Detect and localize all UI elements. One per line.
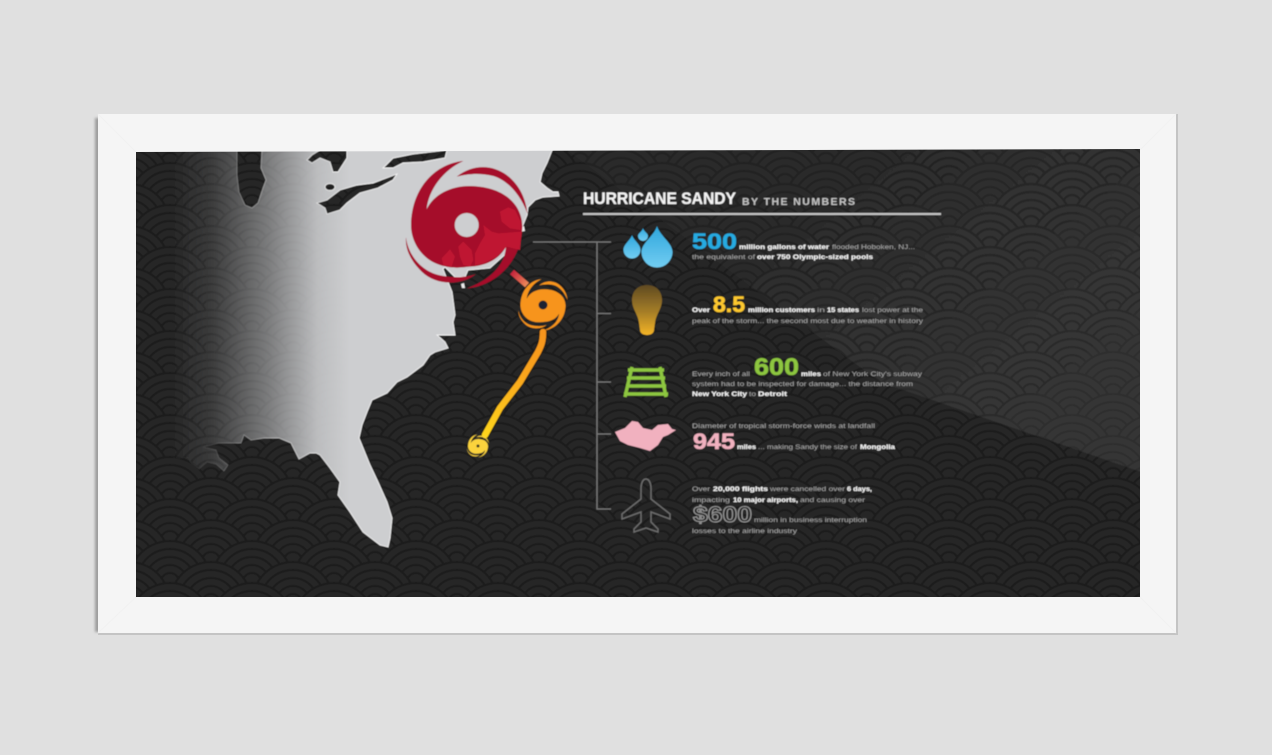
description: 20,000 flights xyxy=(713,486,768,493)
stat: flights xyxy=(622,479,872,535)
description: 15 states xyxy=(827,307,859,314)
description: New York City xyxy=(692,391,747,398)
lighter land patches through storm xyxy=(442,207,522,267)
description: Diameter of tropical storm-force winds at landfall xyxy=(692,423,876,430)
description: miles xyxy=(737,444,756,451)
description: Every inch of all xyxy=(692,371,751,378)
panel: dark infographic xyxy=(130,145,1144,601)
description: impacting xyxy=(692,497,730,504)
track line between storms xyxy=(485,272,543,435)
description: over 750 Olympic-sized pools xyxy=(757,254,873,261)
number 600: 600 xyxy=(754,354,799,381)
description xyxy=(692,486,872,535)
description: peak of the storm... the second most due to weather in history xyxy=(692,318,924,325)
description xyxy=(692,244,915,261)
description: losses to the airline industry xyxy=(692,528,798,535)
description: million gallons of water xyxy=(739,244,830,251)
title: HURRICANE SANDY xyxy=(583,190,736,208)
description: to xyxy=(749,391,756,398)
description xyxy=(692,307,924,325)
number 8.5: 8.5 xyxy=(713,292,745,317)
description: were cancelled over xyxy=(769,486,846,493)
description: and causing over xyxy=(800,497,866,504)
description: 6 days, xyxy=(847,486,872,493)
leader lines timeline xyxy=(533,242,611,509)
stat: power xyxy=(632,285,924,335)
description: ... making Sandy the size of xyxy=(758,444,857,451)
description: the equivalent of xyxy=(692,254,755,261)
description: Mongolia xyxy=(860,444,895,451)
picture frame xyxy=(95,114,1178,635)
icon: light bulb xyxy=(632,285,662,335)
number $600: $600 xyxy=(693,502,752,527)
white coast islands xyxy=(461,226,525,288)
description: 10 major airports, xyxy=(733,497,798,504)
diagonal light sheen xyxy=(698,149,1140,471)
description: flooded Hoboken, NJ... xyxy=(832,244,915,251)
stat: water xyxy=(624,226,915,268)
number 500: 500 xyxy=(692,229,737,254)
icon: railway tracks xyxy=(624,367,668,397)
icon: yellow tropical storm xyxy=(467,434,489,457)
description: miles xyxy=(801,371,821,378)
description: Over xyxy=(692,307,711,314)
description: Detroit xyxy=(758,391,788,398)
description: million in business interruption xyxy=(754,517,867,524)
stat: storm size xyxy=(615,421,895,454)
description: million customers xyxy=(748,307,815,314)
description: lost power at the xyxy=(862,307,923,314)
description xyxy=(692,371,923,398)
title: BY THE NUMBERS xyxy=(742,196,855,208)
icon: Mongolia silhouette xyxy=(615,421,676,451)
description: in xyxy=(817,307,826,314)
description xyxy=(692,423,895,451)
icon: orange hurricane xyxy=(518,279,568,331)
description: Over xyxy=(692,486,711,493)
icon: water drops xyxy=(624,226,672,268)
icon: airplane outline xyxy=(622,479,670,532)
number 945: 945 xyxy=(693,429,735,454)
stat: subway xyxy=(624,354,923,398)
description: system had to be inspected for damage... the distance from xyxy=(692,381,914,388)
map: eastern North America xyxy=(137,148,559,547)
icon: large red hurricane xyxy=(406,161,527,288)
title xyxy=(583,191,856,206)
description: of New York City's subway xyxy=(823,371,923,378)
